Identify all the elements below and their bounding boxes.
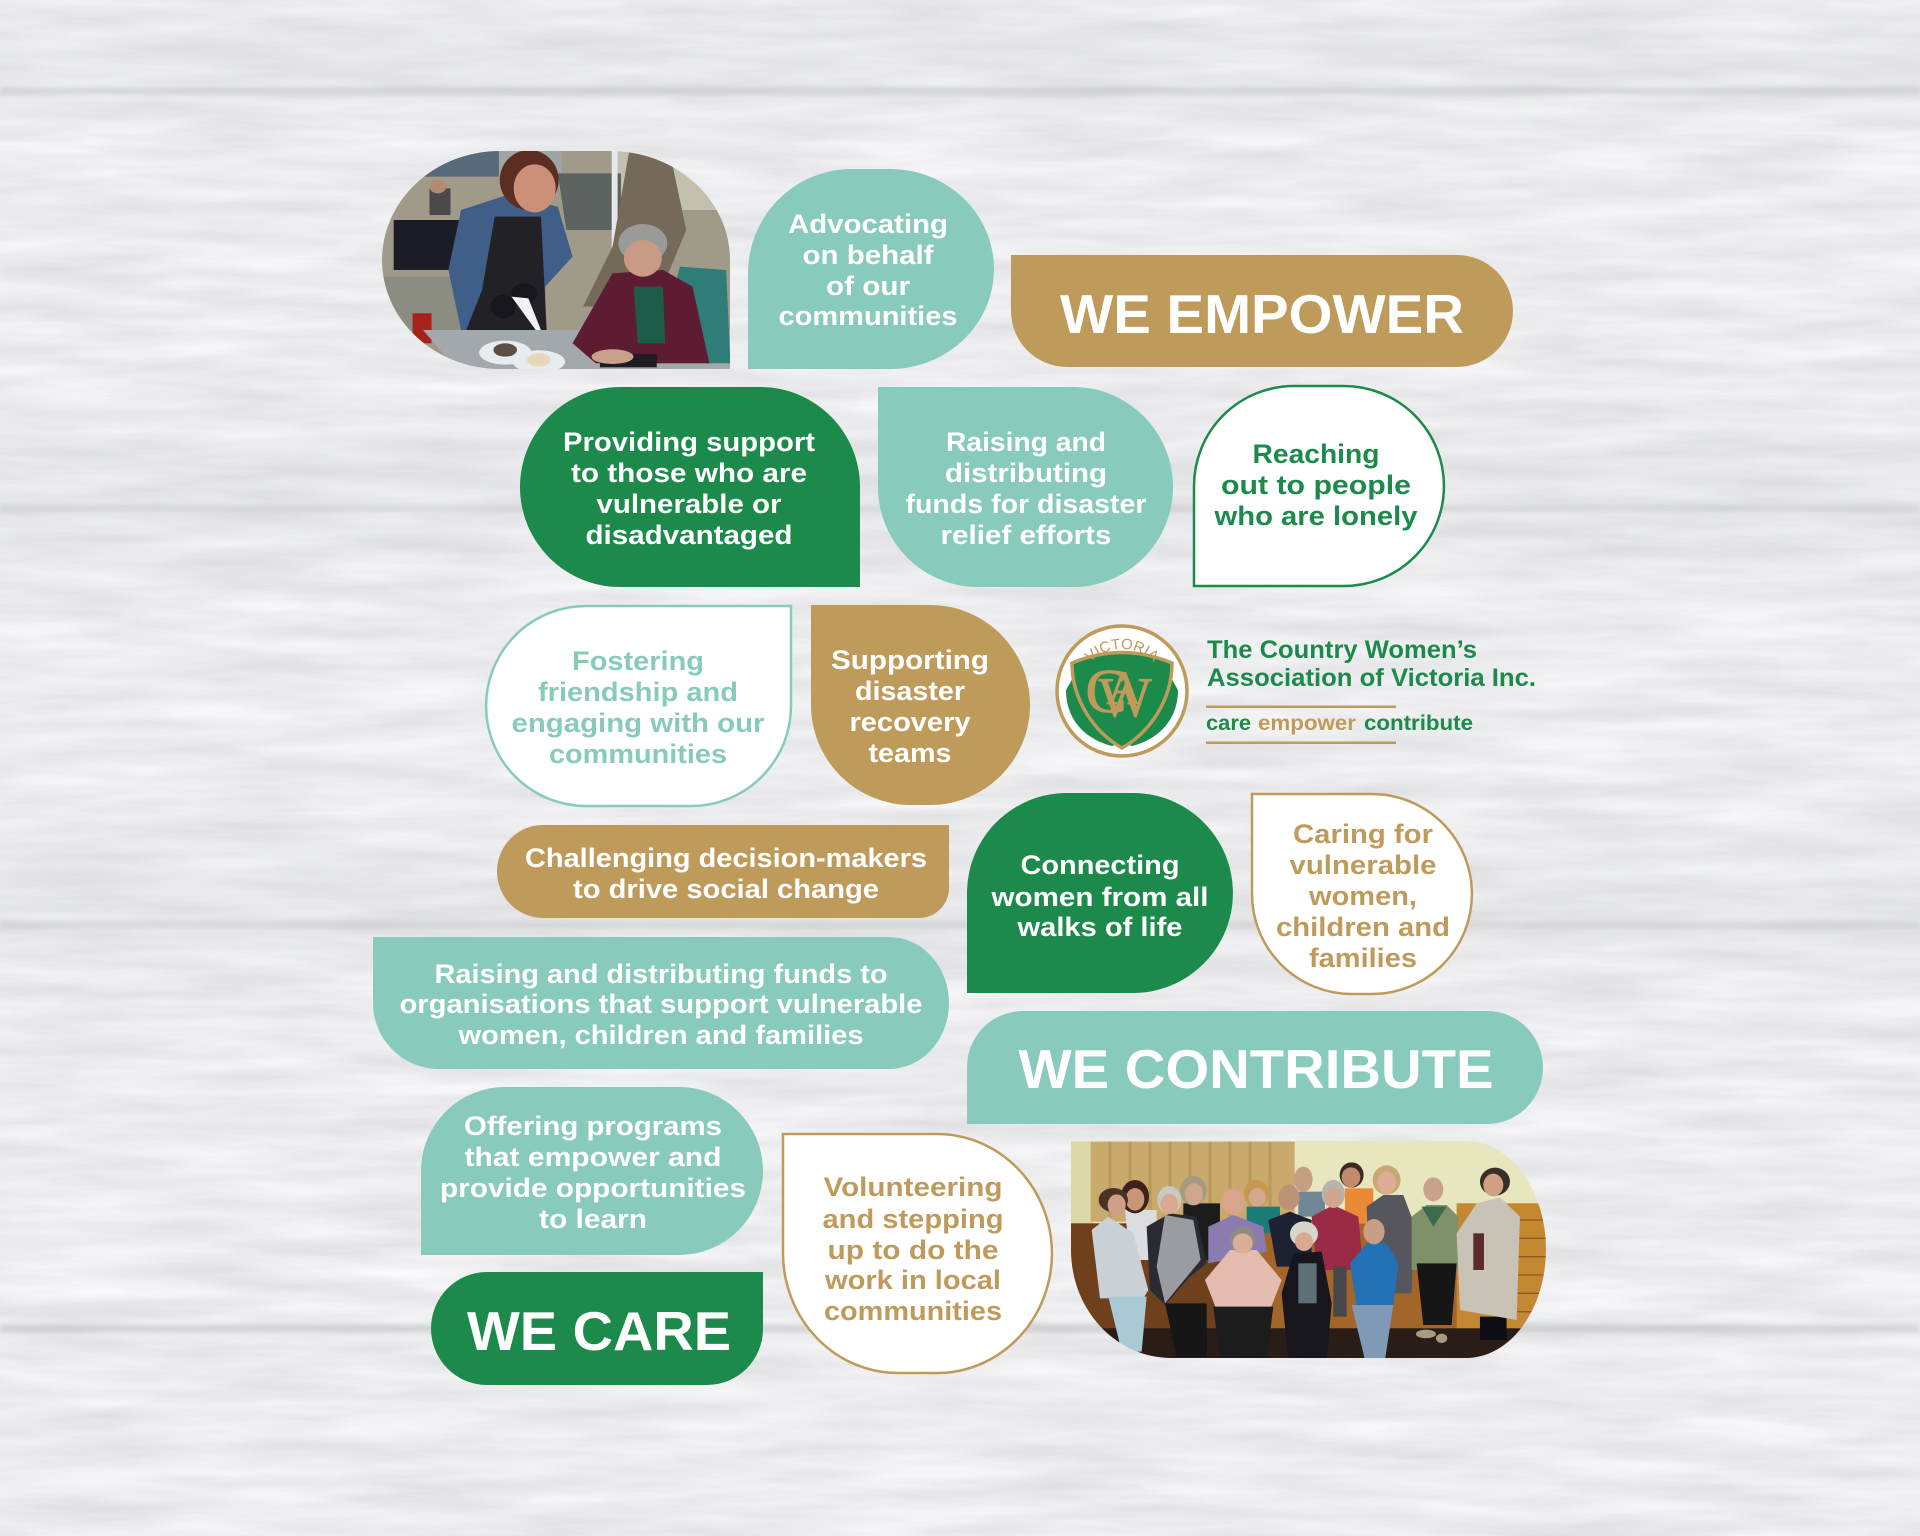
logo text: organisation name and tagline: contribute (1364, 712, 1473, 735)
heading: we care: WE CARE (467, 1300, 731, 1362)
bubble: raising funds for disaster relief: distributing (945, 458, 1107, 488)
bubble: fostering friendship: friendship and (538, 677, 738, 707)
left and right standing (1092, 1217, 1148, 1298)
bubble: advocating: of our (826, 271, 911, 301)
bubble: supporting disaster recovery: recovery (850, 707, 970, 737)
bubble: reaching out: Reaching (1252, 439, 1380, 469)
logo: CWA Victoria emblem: VICTORIA (1084, 638, 1158, 662)
bubble: advocating: communities (778, 301, 958, 331)
bubble: challenging decision-makers: Challenging decision-makers (525, 843, 927, 873)
bubble: volunteering: communities (824, 1296, 1002, 1326)
bubble: raising funds for organisations: Raising and distributing funds to (434, 959, 888, 989)
bubble: providing support (520, 387, 860, 587)
seated row (1205, 1250, 1282, 1310)
bubble: raising funds for disaster relief (878, 387, 1173, 587)
bubble: providing support: Providing support (563, 427, 815, 457)
bubble: caring for vulnerable (1252, 794, 1472, 994)
logo text: organisation name and tagline: The Country Women’s (1207, 636, 1477, 664)
photo: two volunteers serving scones (377, 147, 735, 373)
bubble: caring for vulnerable: families (1309, 943, 1417, 973)
logo: CWA Victoria emblem (1055, 624, 1189, 758)
bubble: volunteering: and stepping (822, 1204, 1004, 1234)
bubble: caring for vulnerable: vulnerable (1290, 850, 1436, 880)
bubble: raising funds for disaster relief: relief efforts (940, 520, 1112, 550)
bubble: supporting disaster recovery: teams (868, 738, 952, 768)
heading: we contribute: WE CONTRIBUTE (1018, 1038, 1494, 1100)
middle row (1268, 1212, 1312, 1267)
bubble: caring for vulnerable: Caring for (1293, 819, 1434, 849)
bubble: offering programs: Offering programs (464, 1111, 722, 1141)
bubble: supporting disaster recovery (811, 605, 1030, 805)
bubble: supporting disaster recovery: disaster (855, 676, 966, 706)
heading: we contribute (967, 1011, 1543, 1124)
bubble: providing support: disadvantaged (586, 520, 792, 550)
bubble: raising funds for organisations (373, 937, 949, 1069)
bubble: raising funds for disaster relief: Raising and (946, 427, 1106, 457)
bubble: fostering friendship: communities (549, 739, 727, 769)
bubble: reaching out: who are lonely (1213, 501, 1418, 531)
bubble: supporting disaster recovery: Supporting (831, 645, 989, 675)
bubble: advocating: on behalf (802, 240, 935, 270)
bubble: connecting women: Connecting (1020, 850, 1180, 880)
bubble: connecting women (967, 793, 1233, 993)
bubble: volunteering: work in local (824, 1265, 1001, 1295)
bubble: raising funds for disaster relief: funds for disaster (906, 489, 1147, 519)
heading: we empower: WE EMPOWER (1060, 283, 1464, 345)
bubble: offering programs (421, 1087, 763, 1255)
logo: CWA Victoria emblem: W (1099, 667, 1152, 729)
bubble: connecting women: walks of life (1016, 912, 1182, 942)
bubble: offering programs: that empower and (464, 1142, 722, 1172)
heading: we care (431, 1272, 763, 1385)
bubble: fostering friendship: Fostering (572, 646, 704, 676)
bubble: advocating: Advocating (788, 209, 948, 239)
bubble: volunteering (783, 1134, 1052, 1373)
bubble: reaching out (1194, 386, 1444, 586)
logo text: organisation name and tagline (1206, 636, 1536, 744)
bubble: offering programs: to learn (539, 1204, 647, 1234)
bubble: offering programs: provide opportunities (440, 1173, 746, 1203)
bubble: providing support: vulnerable or (596, 489, 782, 519)
bubble: challenging decision-makers: to drive social change (573, 874, 879, 904)
bubble: volunteering: up to do the (828, 1235, 998, 1265)
logo: CWA Victoria emblem: C (1085, 658, 1127, 726)
bubble: providing support: to those who are (571, 458, 807, 488)
logo text: organisation name and tagline: empower (1258, 712, 1356, 735)
logo: CWA Victoria emblem: A (1107, 662, 1142, 715)
bubble: advocating (748, 169, 994, 369)
bubble: caring for vulnerable: women, (1308, 881, 1417, 911)
bubble: connecting women: women from all (990, 882, 1208, 912)
heading: we empower (1011, 255, 1513, 367)
bubble: volunteering: Volunteering (824, 1172, 1002, 1202)
photo: group of CWA members (1070, 1140, 1550, 1363)
bubble: raising funds for organisations: women, children and families (457, 1020, 864, 1050)
bubble: fostering friendship (486, 606, 791, 806)
back row (1125, 1210, 1157, 1260)
bubble: challenging decision-makers (497, 825, 949, 918)
bubble: reaching out: out to people (1221, 470, 1411, 500)
logo text: organisation name and tagline: care (1206, 712, 1251, 735)
logo text: organisation name and tagline: Association of Victoria Inc. (1207, 664, 1536, 692)
bubble: caring for vulnerable: children and (1276, 912, 1450, 942)
bubble: fostering friendship: engaging with our (512, 708, 765, 738)
bubble: raising funds for organisations: organisations that support vulnerable (400, 989, 922, 1019)
